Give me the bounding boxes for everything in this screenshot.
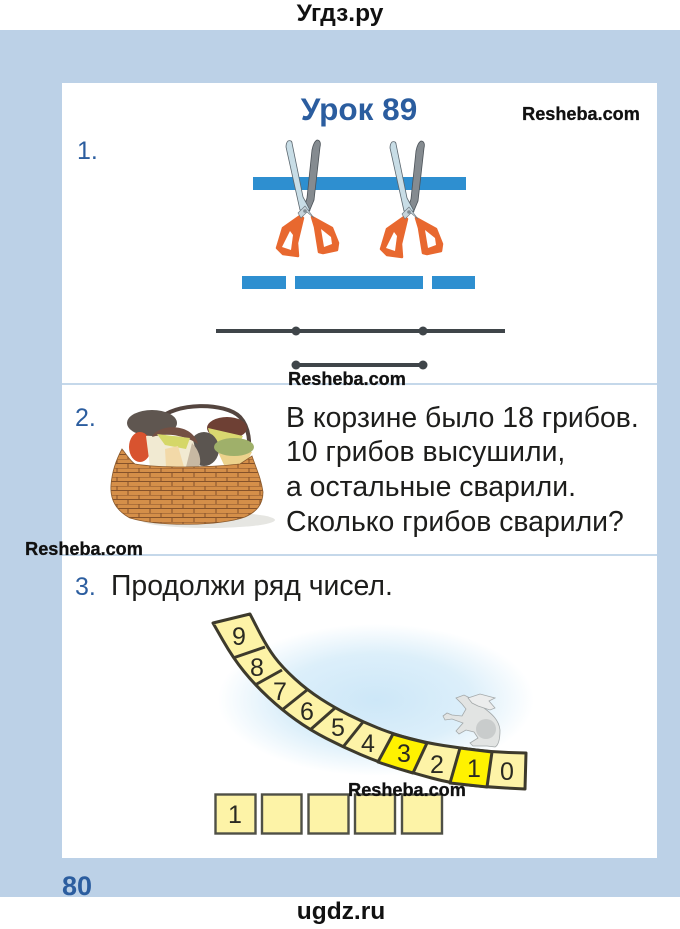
highlighted cell 1 — [450, 748, 492, 787]
number ribbon — [213, 614, 526, 789]
ribbon numbers: 4 — [361, 730, 375, 758]
divider one — [62, 383, 657, 385]
task 2 text: Сколько грибов сварили? — [286, 506, 624, 538]
white page panel — [62, 83, 657, 858]
task 3 text: Продолжи ряд чисел. — [111, 570, 393, 602]
sky glow — [218, 624, 534, 776]
first answer digit: 1 — [228, 801, 242, 829]
icon: left scissors — [277, 140, 338, 256]
ribbon numbers: 8 — [250, 654, 264, 682]
task 2 text: 10 грибов высушили, — [286, 436, 565, 468]
task 2 text: В корзине было 18 грибов. — [286, 402, 639, 434]
ribbon numbers: 6 — [300, 698, 314, 726]
lesson title: Урок 89 — [301, 91, 417, 127]
ribbon numbers: 0 — [500, 758, 514, 786]
ribbon numbers: 2 — [430, 751, 444, 779]
highlighted cell 3 — [378, 734, 427, 773]
watermark bottom: Resheba.com — [348, 780, 466, 800]
task 1 number: 1. — [77, 137, 98, 165]
site header: Угдз.ру — [297, 0, 384, 27]
ribbon numbers: 1 — [467, 755, 481, 783]
ribbon numbers — [232, 623, 514, 786]
ribbon body — [213, 614, 526, 789]
task 2 text: а остальные сварили. — [286, 471, 576, 503]
segment — [292, 360, 428, 370]
watermark under segment: Resheba.com — [288, 369, 406, 389]
ribbon numbers: 5 — [331, 714, 345, 742]
three cut strips — [242, 276, 475, 289]
line with two points — [216, 326, 505, 336]
icon: hare — [443, 694, 500, 747]
watermark left: Resheba.com — [25, 539, 143, 559]
task 2 number: 2. — [75, 404, 96, 432]
blue strip — [253, 177, 466, 190]
cell dividers — [233, 647, 363, 747]
icon: mushroom basket — [111, 406, 275, 528]
ribbon numbers: 9 — [232, 623, 246, 651]
divider two — [62, 554, 657, 556]
icon: right scissors — [381, 141, 442, 257]
answer boxes — [216, 794, 442, 834]
page number: 80 — [62, 871, 92, 901]
watermark top: Resheba.com — [522, 104, 640, 124]
task 1 diagram — [216, 140, 505, 370]
ribbon numbers: 7 — [273, 678, 287, 706]
site footer: ugdz.ru — [297, 898, 385, 925]
ribbon numbers: 3 — [397, 740, 411, 768]
task 3 number: 3. — [75, 573, 96, 601]
